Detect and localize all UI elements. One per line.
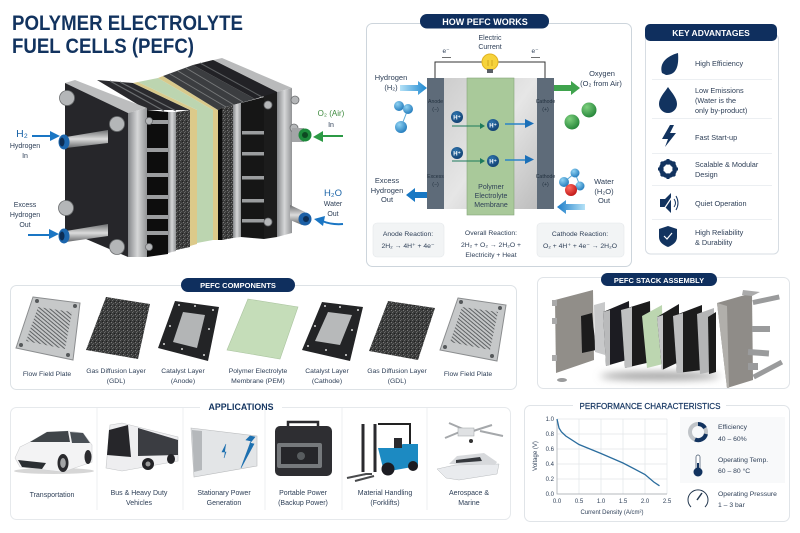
heading xyxy=(645,24,777,41)
hydrogen in connector xyxy=(58,130,108,150)
right end plate xyxy=(205,58,292,239)
component: gas diffusion layer: (GDL) xyxy=(107,378,125,385)
stack label: oxygen in xyxy=(313,109,345,142)
water output: (H₂O) xyxy=(594,187,614,196)
advantage: quiet operation: Quiet Operation xyxy=(695,199,747,208)
stack label: excess hydrogen out: Hydrogen xyxy=(10,212,40,219)
advantage: high efficiency xyxy=(661,53,743,75)
membrane label: Polymer xyxy=(478,184,504,191)
electrode labels: (+) xyxy=(542,107,549,113)
layer tops xyxy=(97,60,277,111)
hydrogen input: Hydrogen xyxy=(375,73,407,82)
proton spheres xyxy=(451,111,499,167)
axis titles: Current Density (A/cm²) xyxy=(580,510,644,516)
title: FUEL CELLS (PEFC) xyxy=(12,35,194,58)
oxygen molecules xyxy=(564,102,596,130)
electrode labels: Cathode xyxy=(536,99,555,105)
application: bus: Bus & Heavy Duty xyxy=(111,490,168,497)
component: catalyst layer cathode: (Cathode) xyxy=(312,378,342,385)
bolts xyxy=(58,90,299,254)
stack label: water out: Out xyxy=(327,211,339,218)
anode reaction: Anode Reaction: xyxy=(383,231,433,238)
line chart: voltage vs current density xyxy=(533,417,672,516)
y axis ticks: 0.6 xyxy=(546,447,555,453)
boat xyxy=(437,453,499,480)
electric current label: Current xyxy=(478,44,502,51)
water output: Out xyxy=(598,196,611,205)
panel: PEFC stack assembly xyxy=(538,273,790,388)
application: stationary power xyxy=(191,428,257,507)
stack label: oxygen in: O₂ (Air) xyxy=(318,109,345,118)
component: catalyst layer cathode xyxy=(302,302,363,385)
advantage: low emissions xyxy=(659,86,747,115)
overall reaction: 2H₂ + O₂ → 2H₂O + xyxy=(461,242,521,249)
proton spheres: H⁺ xyxy=(489,122,497,130)
advantage: fast start-up: Fast Start-up xyxy=(695,133,737,142)
x axis ticks: 0.0 xyxy=(553,499,562,505)
stack label: excess hydrogen out: Out xyxy=(19,222,31,229)
circuit wire xyxy=(435,62,545,78)
stat background xyxy=(680,417,785,483)
heading: APPLICATIONS xyxy=(208,402,274,412)
cell diagram xyxy=(427,78,555,215)
x axis ticks: 0.5 xyxy=(575,499,584,505)
drone xyxy=(445,423,503,443)
water output: Water xyxy=(594,177,614,186)
icon: muted speaker xyxy=(660,193,678,213)
component: gas diffusion layer: Gas Diffusion Layer xyxy=(367,368,428,375)
advantage: low emissions: only by-product) xyxy=(695,106,747,115)
application: portable power xyxy=(275,422,332,507)
panel: PEFC components xyxy=(10,278,516,390)
component: gas diffusion layer: Gas Diffusion Layer xyxy=(86,368,147,375)
icon: ring gauge xyxy=(690,424,706,440)
stack label: water out: Water xyxy=(324,201,343,208)
y axis ticks: 0.2 xyxy=(546,477,555,483)
anode reaction xyxy=(373,223,444,257)
electric current label xyxy=(478,35,502,51)
membrane label xyxy=(474,184,508,209)
stat: operating temperature: Operating Temp. xyxy=(718,457,768,464)
stack label: water out: H₂O xyxy=(324,188,342,199)
advantage: low emissions: Low Emissions xyxy=(695,86,744,95)
proton spheres: H⁺ xyxy=(453,150,461,158)
y axis ticks: 0.4 xyxy=(546,462,555,468)
application: material handling: (Forklifts) xyxy=(370,500,400,507)
panel: performance characteristics xyxy=(524,400,790,522)
line chart: voltage vs current density: Voltage (V) xyxy=(533,441,539,471)
membrane label: Electrolyte xyxy=(475,193,507,200)
oxygen output: Oxygen xyxy=(589,69,615,78)
component: flow field plate xyxy=(440,298,506,378)
hydrogen input xyxy=(375,73,427,95)
oxygen connector xyxy=(292,128,312,142)
stack label: excess hydrogen out: Excess xyxy=(14,202,37,209)
right plate xyxy=(717,293,753,388)
component: gas diffusion layer xyxy=(367,301,435,385)
application: aerospace and marine: Aerospace & xyxy=(449,490,489,497)
component: gas diffusion layer xyxy=(86,297,150,385)
y axis ticks xyxy=(546,417,555,498)
stat: efficiency: 40 – 60% xyxy=(718,436,747,443)
y axis ticks: 1.0 xyxy=(546,417,555,423)
application: stationary power: Generation xyxy=(207,500,241,507)
oxygen output: (O₂ from Air) xyxy=(580,79,622,88)
heading: PEFC STACK ASSEMBLY xyxy=(614,276,704,285)
cathode reaction: O₂ + 4H⁺ + 4e⁻ → 2H₂O xyxy=(543,243,617,250)
left plate xyxy=(555,290,594,373)
icon: leaf xyxy=(661,53,678,75)
stat: efficiency xyxy=(690,424,748,443)
overall reaction xyxy=(461,230,521,259)
excess hydrogen output: Out xyxy=(381,195,394,204)
stat: operating temperature xyxy=(694,455,768,476)
electrode labels: Excess xyxy=(427,174,444,180)
component: flow field plate: Flow Field Plate xyxy=(23,371,71,378)
application: stationary power: Stationary Power xyxy=(197,490,251,497)
container xyxy=(191,428,257,477)
component: polymer electrolyte membrane xyxy=(227,299,298,385)
stack label: hydrogen in: In xyxy=(22,153,28,160)
advantage: reliability xyxy=(659,226,744,247)
water connector xyxy=(290,205,312,226)
hydrogen out connector xyxy=(58,224,108,244)
icon: lightning bolt xyxy=(662,125,676,147)
proton spheres: H⁺ xyxy=(453,114,461,122)
electron labels: e⁻ xyxy=(442,48,450,55)
car xyxy=(14,431,94,474)
anode reaction: 2H₂ → 4H⁺ + 4e⁻ xyxy=(381,243,435,250)
component: gas diffusion layer: (GDL) xyxy=(388,378,406,385)
electrode labels: (−) xyxy=(432,107,439,113)
heading: PEFC COMPONENTS xyxy=(200,281,276,290)
icon: gear xyxy=(658,159,678,179)
electrode labels: Anode xyxy=(428,99,443,105)
advantage: scalable xyxy=(658,159,759,179)
overall reaction: Overall Reaction: xyxy=(465,230,517,237)
proton flow arrows xyxy=(452,119,534,164)
component: catalyst layer anode: Catalyst Layer xyxy=(161,368,205,375)
stat: operating temperature: 60 – 80 °C xyxy=(718,467,750,475)
stack label: excess hydrogen out xyxy=(10,202,59,239)
x axis ticks: 2.5 xyxy=(663,499,672,505)
component: polymer electrolyte membrane: Polymer Electrolyte xyxy=(229,368,287,375)
layer edges xyxy=(147,97,264,257)
y axis ticks: 0.0 xyxy=(546,492,555,498)
electric current label: Electric xyxy=(479,35,502,42)
heading xyxy=(181,278,295,292)
advantage: high efficiency: High Efficiency xyxy=(695,59,743,68)
component: catalyst layer anode xyxy=(158,301,219,385)
panel: how PEFC works xyxy=(366,14,632,266)
application: material handling xyxy=(347,424,418,507)
application: aerospace and marine xyxy=(437,423,503,507)
water molecule xyxy=(559,168,584,196)
panel: applications xyxy=(10,400,510,520)
application: material handling: Material Handling xyxy=(358,490,412,497)
left end plate xyxy=(65,80,147,257)
forklift xyxy=(347,424,418,481)
anode electrode xyxy=(427,78,444,209)
excess hydrogen output: Hydrogen xyxy=(371,186,403,195)
hydrogen input: (H₂) xyxy=(384,83,398,92)
advantage: fast start-up xyxy=(662,125,737,147)
hydrogen molecules xyxy=(394,101,413,133)
component: flow field plate: Flow Field Plate xyxy=(444,371,492,378)
application: transportation xyxy=(14,431,94,499)
x axis ticks: 2.0 xyxy=(641,499,650,505)
icon: shield xyxy=(659,226,677,247)
power station xyxy=(275,422,332,476)
stack label: hydrogen in: H₂ xyxy=(16,128,28,140)
icon: light bulb xyxy=(482,54,498,73)
overall reaction: Electricity + Heat xyxy=(465,252,517,259)
component: catalyst layer cathode: Catalyst Layer xyxy=(305,368,349,375)
stack label: oxygen in: In xyxy=(328,122,334,129)
excess hydrogen output xyxy=(371,176,427,204)
advantage: quiet operation xyxy=(660,193,747,213)
title xyxy=(12,12,243,58)
advantage: low emissions: (Water is the xyxy=(695,96,736,105)
separator layers xyxy=(603,301,630,366)
membrane xyxy=(467,78,514,215)
cathode reaction xyxy=(537,223,624,257)
stack label: hydrogen in xyxy=(10,128,60,160)
stack label: water out xyxy=(314,188,343,226)
fuel cell stack illustration xyxy=(58,58,312,257)
excess hydrogen output: Excess xyxy=(375,176,399,185)
heading: PERFORMANCE CHARACTERISTICS xyxy=(580,401,721,411)
stat: operating pressure: 1 – 3 bar xyxy=(718,502,746,509)
heading: HOW PEFC WORKS xyxy=(442,17,528,27)
rods and bolts xyxy=(748,294,783,379)
y axis ticks: 0.8 xyxy=(546,432,555,438)
application: portable power: (Backup Power) xyxy=(278,500,328,507)
heading: KEY ADVANTAGES xyxy=(672,28,750,38)
application: portable power: Portable Power xyxy=(279,490,328,497)
cathode electrode xyxy=(537,78,554,209)
icon: gauge xyxy=(688,490,708,507)
oxygen output xyxy=(554,69,622,95)
component: catalyst layer anode: (Anode) xyxy=(171,378,195,385)
stat: operating pressure xyxy=(688,490,777,509)
bus xyxy=(106,423,178,471)
application: bus xyxy=(106,423,178,507)
x axis ticks xyxy=(553,499,672,505)
electrode labels: (+) xyxy=(542,182,549,188)
stat: operating pressure: Operating Pressure xyxy=(718,491,777,498)
x axis ticks: 1.0 xyxy=(597,499,606,505)
membrane label: Membrane xyxy=(474,202,508,209)
electrode labels xyxy=(427,99,555,188)
proton spheres: H⁺ xyxy=(489,158,497,166)
electron labels xyxy=(442,48,540,58)
electrode labels: Cathode xyxy=(536,174,555,180)
application: aerospace and marine: Marine xyxy=(458,500,480,507)
heading xyxy=(420,14,549,28)
component: flow field plate xyxy=(16,297,80,378)
advantage: scalable: Scalable & Modular xyxy=(695,160,759,169)
electron labels: e⁻ xyxy=(531,48,539,55)
exploded stack illustration xyxy=(552,290,783,388)
stack label: hydrogen in: Hydrogen xyxy=(10,143,40,150)
advantage: reliability: High Reliability xyxy=(695,228,744,237)
icon: thermometer xyxy=(694,455,702,476)
x axis ticks: 1.5 xyxy=(619,499,628,505)
advantage: reliability: & Durability xyxy=(695,238,733,247)
cathode reaction: Cathode Reaction: xyxy=(552,231,608,238)
stat: efficiency: Efficiency xyxy=(718,424,748,431)
heading xyxy=(601,273,717,286)
application: bus: Vehicles xyxy=(126,500,153,507)
water output xyxy=(557,177,614,214)
electrode labels: (−) xyxy=(432,182,439,188)
title: POLYMER ELECTROLYTE xyxy=(12,12,243,35)
component: polymer electrolyte membrane: Membrane (PEM) xyxy=(231,378,285,385)
advantage: scalable: Design xyxy=(695,170,718,179)
icon: water drop xyxy=(659,87,677,113)
application: transportation: Transportation xyxy=(30,492,75,499)
tie rods xyxy=(147,120,264,235)
panel: key advantages xyxy=(645,24,778,254)
